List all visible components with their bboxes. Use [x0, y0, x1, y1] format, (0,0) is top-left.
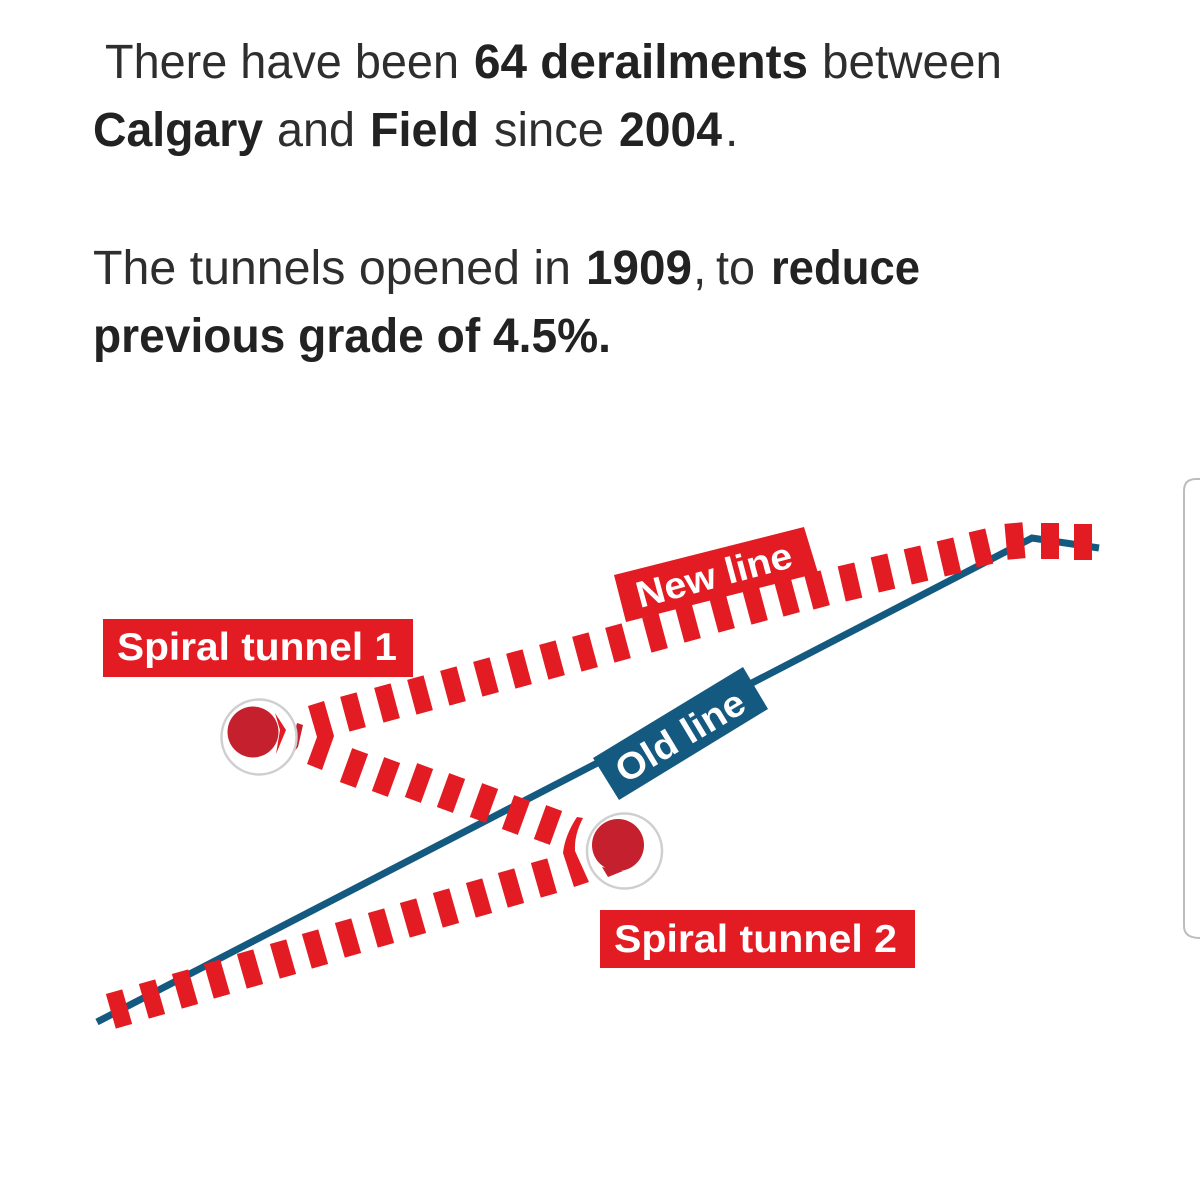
- text block: tunnels: [93, 242, 920, 363]
- text block: tunnels: 1909: [586, 242, 692, 295]
- text block: tunnels: reduce: [771, 242, 920, 295]
- new line label: [614, 527, 818, 622]
- new line track ties: [307, 522, 1092, 770]
- text block: derailments: There have been: [105, 36, 459, 89]
- text block: derailments: 64 derailments: [474, 36, 808, 89]
- text block: derailments: .: [725, 104, 738, 157]
- text block: derailments: and: [277, 104, 355, 157]
- text block: derailments: Field: [370, 104, 479, 157]
- label: spiral tunnel 1: [103, 619, 413, 677]
- icon: spiral tunnel 1 portal: [222, 700, 303, 774]
- text block: derailments: [93, 36, 1002, 157]
- branch track ties: [340, 748, 562, 845]
- old line track: [97, 538, 1099, 1022]
- label: spiral tunnel 2: [600, 910, 915, 968]
- screen edge handle: [1184, 479, 1200, 938]
- old line label: Old line: [608, 682, 753, 791]
- text block: tunnels: to: [716, 242, 755, 295]
- text block: tunnels: previous grade of 4.5%.: [93, 310, 611, 363]
- lower track ties: [106, 817, 589, 1029]
- text block: derailments: since: [494, 104, 604, 157]
- text block: tunnels: The tunnels opened in: [93, 242, 571, 295]
- text block: derailments: between: [822, 36, 1002, 89]
- new line label: New line: [631, 535, 797, 616]
- text block: tunnels: ,: [693, 242, 706, 295]
- icon: spiral tunnel 2 portal: [587, 814, 662, 888]
- label: spiral tunnel 2: Spiral tunnel 2: [614, 918, 897, 961]
- label: spiral tunnel 1: Spiral tunnel 1: [117, 626, 397, 669]
- text block: derailments: Calgary: [93, 104, 263, 157]
- text block: derailments: 2004: [619, 104, 722, 157]
- old line label: [593, 667, 768, 800]
